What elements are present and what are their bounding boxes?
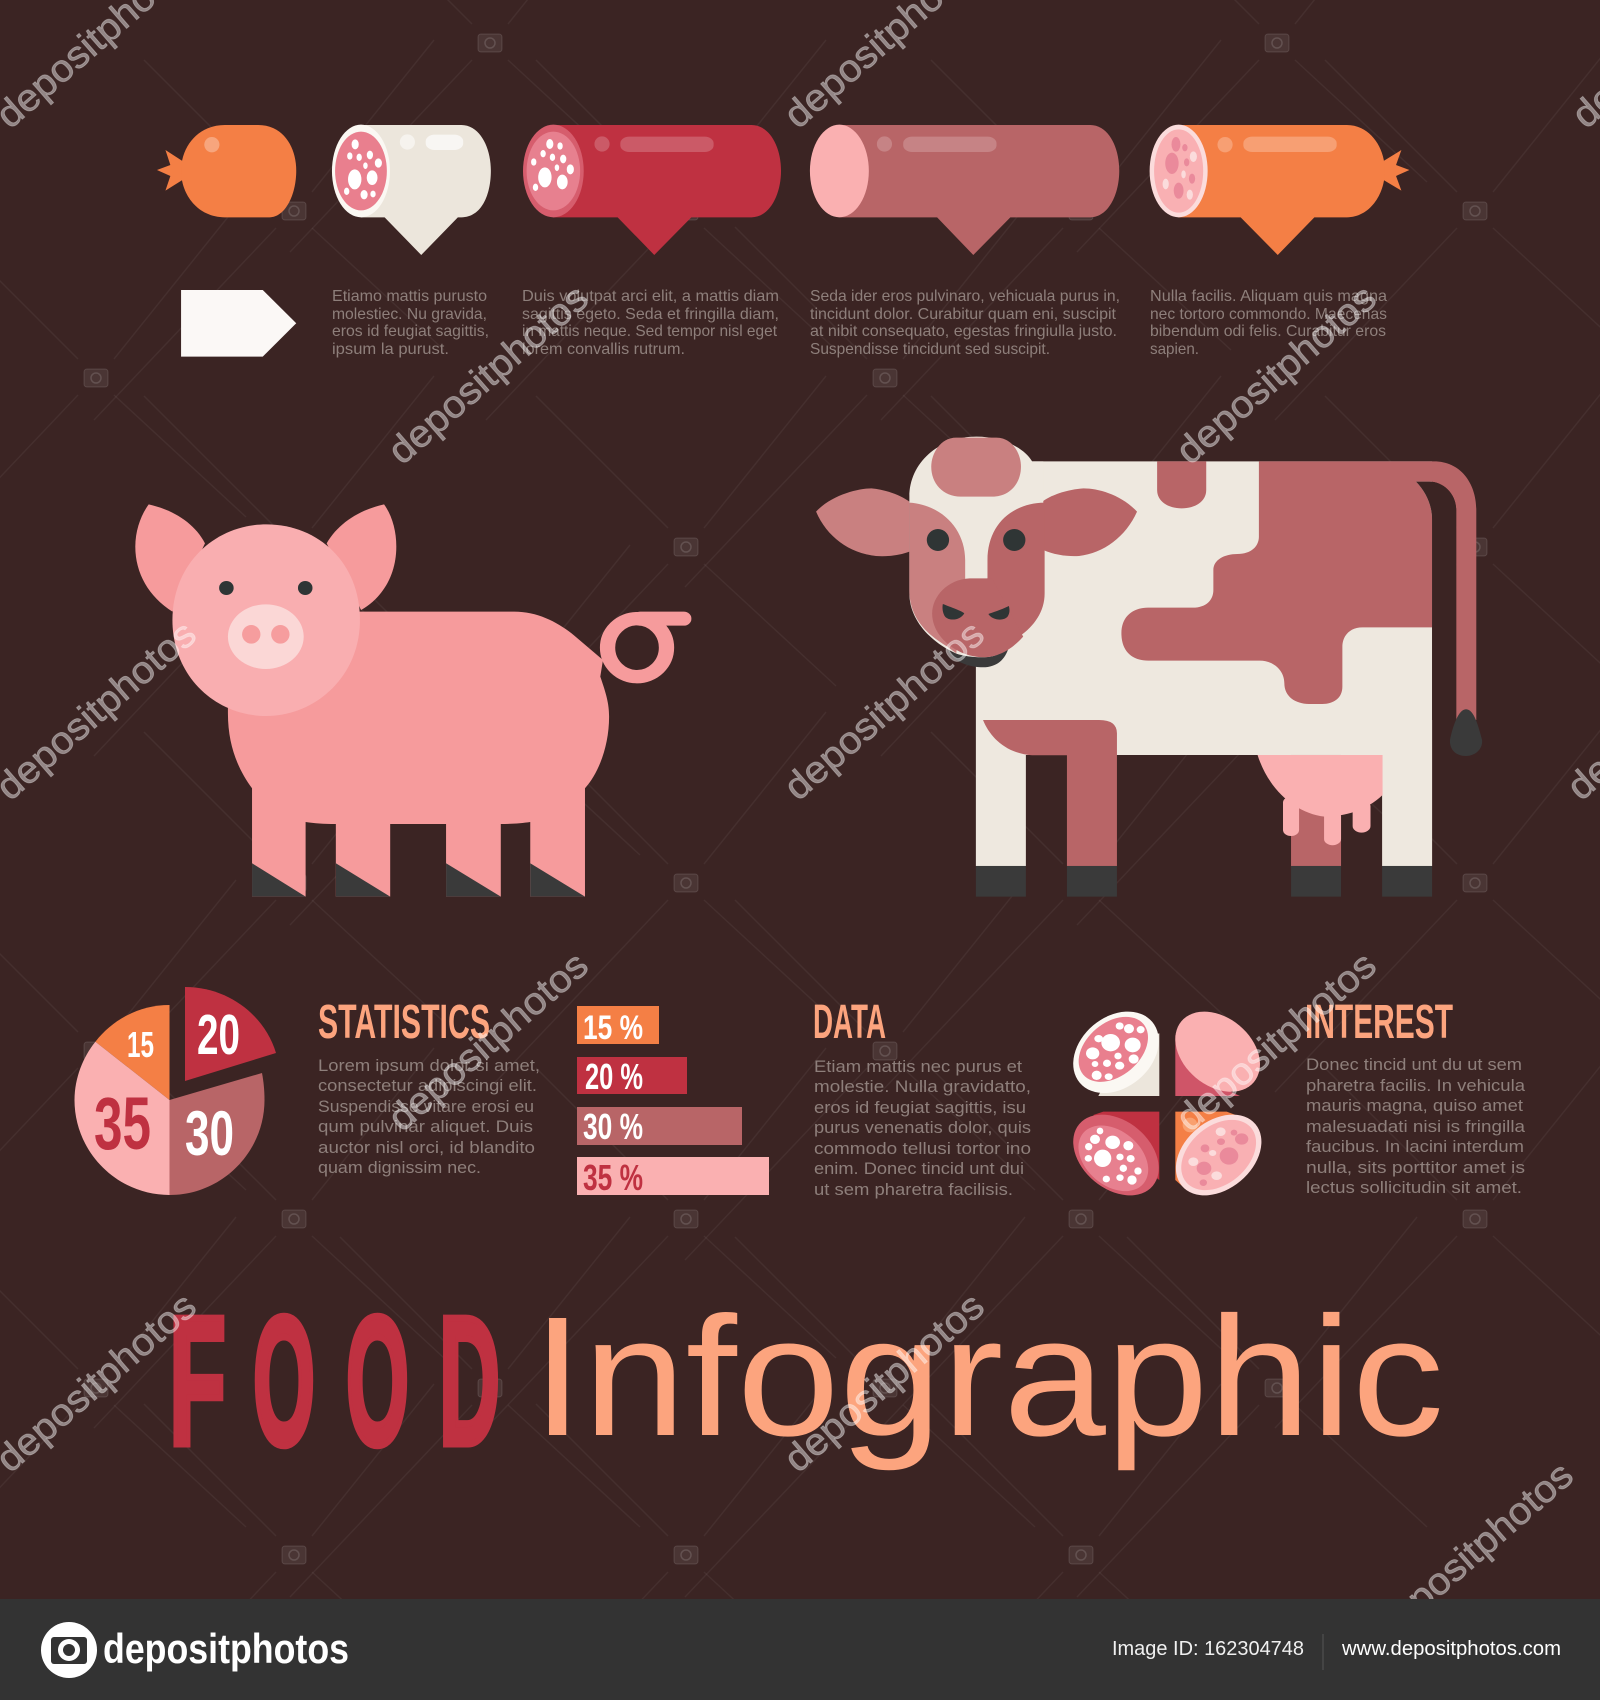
pie slice 15 [95, 1005, 170, 1100]
text block: data: Etiam mattis nec purus et [814, 1057, 1022, 1076]
text block: interest: nulla, sits porttitor amet is [1306, 1158, 1525, 1177]
bar 35 percent: 35 % [583, 1157, 643, 1198]
cow tail tuft [1450, 709, 1482, 756]
text block: red sausage: sagittis egeto. Seda et fringilla diam, [522, 306, 779, 323]
pie label 35: 35 [94, 1082, 151, 1165]
pig tail [608, 612, 691, 677]
pig ears [135, 504, 396, 612]
text block: white sausage: ipsum la purust. [332, 341, 449, 358]
text block: brown sausage: tincidunt dolor. Curabitur quam eni, suscipit [810, 306, 1117, 323]
cow gap behind tail [1416, 482, 1456, 720]
text block: white sausage: eros id feugiat sagittis, [332, 323, 489, 340]
text block: statistics: qum pulvinar aliquet. Duis [318, 1117, 533, 1136]
footer url: www.depositphotos.com [1341, 1638, 1561, 1660]
text block: brown sausage: Suspendisse tincidunt sed suscipit. [810, 341, 1050, 358]
white tag arrow [181, 290, 296, 357]
title: FOOD: O [346, 1278, 409, 1483]
text block: interest: Donec tincid unt du ut sem [1306, 1055, 1522, 1074]
cow hooves [976, 866, 1432, 897]
cow body [976, 461, 1432, 866]
footer logo icon [41, 1622, 97, 1678]
text block: data: commodo tellusi tortor ino [814, 1139, 1031, 1158]
icon: four sausage slices [1057, 995, 1277, 1212]
bar 30 percent [577, 1106, 742, 1147]
bar chart [577, 1006, 769, 1198]
text block: statistics: Lorem ipsum dolor si amet, [318, 1056, 540, 1075]
text block: red sausage: lorem convallis rutrum. [522, 341, 685, 358]
pig hooves [252, 863, 585, 897]
title: D [439, 1278, 500, 1483]
cow ears [816, 488, 1137, 556]
text block: interest: pharetra facilis. In vehicula [1306, 1076, 1526, 1095]
text block: orange sausage: Nulla facilis. Aliquam quis magna [1150, 288, 1387, 305]
slice: white [1057, 995, 1175, 1110]
cow udder [1258, 755, 1383, 845]
watermark text: depositphotos [776, 1285, 993, 1481]
text block: white sausage: molestiec. Nu gravida, [332, 306, 487, 323]
slice: red [1057, 1098, 1175, 1212]
pig illustration [135, 504, 691, 897]
heading: data: DATA [813, 996, 886, 1049]
pig body [228, 612, 609, 897]
text block: data: purus venenatis dolor, quis [814, 1118, 1031, 1137]
text block: interest [1306, 1055, 1526, 1197]
title: FOOD [169, 1278, 500, 1483]
text block: data [814, 1057, 1031, 1199]
sausage row right [810, 125, 1409, 255]
text block: brown sausage: at nibit consequato, egestas fringiulla justo. [810, 323, 1117, 340]
pig snout [228, 604, 304, 669]
footer image id: Image ID: 162304748 [1112, 1638, 1304, 1660]
slice: pink [1160, 995, 1276, 1108]
sausage row left [157, 125, 781, 357]
cow brown legs [983, 720, 1341, 867]
bar 20 percent: 20 % [585, 1056, 643, 1097]
pie slice 30 [170, 1073, 264, 1195]
watermark text: depositphotos [380, 944, 597, 1140]
text block: red sausage [522, 288, 779, 358]
text block: white sausage: Etiamo mattis purusto [332, 288, 487, 305]
heading: interest: INTEREST [1305, 996, 1453, 1049]
text block: interest: faucibus. In lacini interdum [1306, 1137, 1524, 1156]
text block: orange sausage: nec tortoro commondo. Maecenas [1150, 306, 1387, 323]
text block: statistics: consectetur adipiscingi elit. [318, 1076, 537, 1095]
title: FOOD: F [169, 1278, 226, 1483]
title: FOOD: O [253, 1278, 315, 1483]
pig eyes [219, 581, 312, 595]
watermark text: depositphotos [1168, 944, 1385, 1140]
watermark text: depositphotos [380, 277, 597, 473]
watermark text: depositphotos [776, 613, 993, 809]
sausage: red [523, 125, 781, 255]
pie label 30: 30 [185, 1099, 234, 1169]
text block: orange sausage [1150, 288, 1387, 358]
text block: orange sausage: bibendum odi felis. Curabitur eros [1150, 323, 1386, 340]
pie label 20: 20 [197, 1003, 240, 1067]
text block: white sausage [332, 288, 489, 358]
text block: orange sausage: sapien. [1150, 341, 1199, 358]
cow head [909, 437, 1045, 667]
text block: data: enim. Donec tincid unt dui [814, 1159, 1024, 1178]
text block: statistics: auctor nisl orci, id blandito [318, 1138, 535, 1157]
text block: interest: lectus sollicitudin sit amet. [1306, 1178, 1522, 1197]
text block: statistics [318, 1056, 540, 1177]
cow hide patch and tail [1121, 461, 1476, 720]
pie label 15: 15 [127, 1024, 154, 1065]
text block: interest: malesuadati nisi is fringilla [1306, 1117, 1526, 1136]
pie slice 20 [185, 987, 276, 1081]
watermark text: depositphotos [1365, 1454, 1582, 1650]
sausage: brown [810, 125, 1119, 255]
slice: orange [1160, 1098, 1277, 1212]
text block: interest: mauris magna, quiso amet [1306, 1096, 1523, 1115]
pig head [172, 524, 360, 716]
title: Infographic: Infographic [532, 1282, 1444, 1472]
text block: red sausage: in mattis neque. Sed tempor nisl eget [522, 323, 778, 340]
cow illustration [816, 437, 1482, 897]
pie slice 35 [74, 1042, 170, 1195]
sausage: orange with pink cut [1150, 125, 1409, 255]
text block: data: molestie. Nulla gravidatto, [814, 1077, 1031, 1096]
bar 35 percent [577, 1157, 769, 1198]
heading: statistics: STATISTICS [318, 996, 490, 1049]
bar 30 percent: 30 % [583, 1106, 643, 1147]
footer bar [0, 1599, 1600, 1700]
text block: brown sausage: Seda ider eros pulvinaro, vehicuala purus in, [810, 288, 1120, 305]
text block: statistics: quam dignissim nec. [318, 1158, 481, 1177]
title [169, 1278, 1444, 1483]
text block: red sausage: Duis volutpat arci elit, a mattis diam [522, 288, 779, 305]
sausage: orange end [157, 125, 296, 217]
text block: data: eros id feugiat sagittis, isu [814, 1098, 1026, 1117]
text block: statistics: Suspendisse vitare erosi eu [318, 1097, 534, 1116]
text block: brown sausage [810, 288, 1120, 358]
pie chart [74, 987, 276, 1195]
bar 15 percent: 15 % [583, 1009, 643, 1047]
sausage: white [332, 125, 491, 255]
text block: data: ut sem pharetra facilisis. [814, 1180, 1013, 1199]
footer logo text: depositphotos [103, 1625, 349, 1672]
watermark text: depositphotos [1168, 277, 1385, 473]
